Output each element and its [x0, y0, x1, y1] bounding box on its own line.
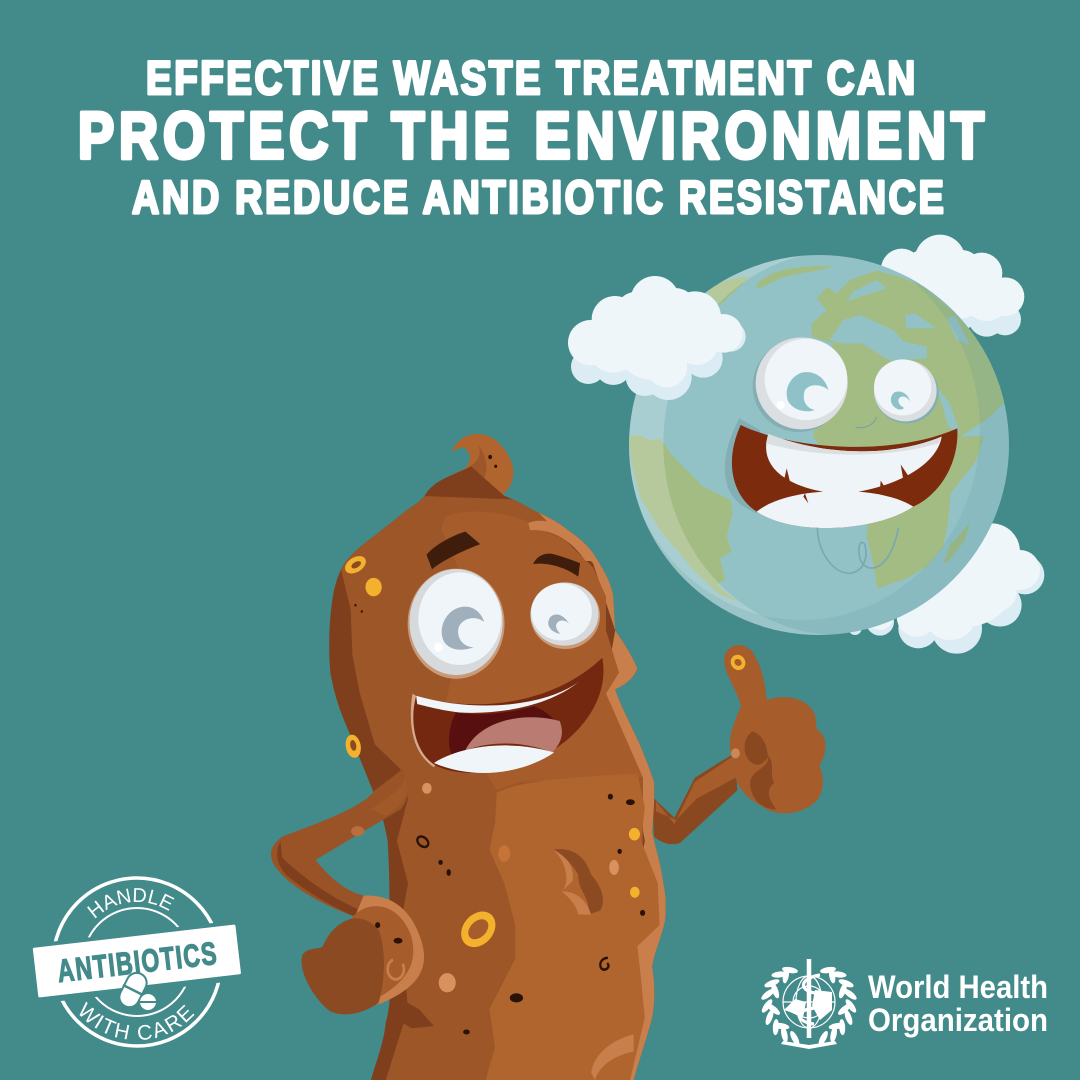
title	[78, 52, 984, 223]
cloud: top right	[881, 235, 1024, 337]
globe nose and chin	[817, 417, 898, 573]
stamp arc text: HANDLE: HANDLE	[87, 888, 174, 918]
rim light	[534, 510, 666, 1080]
globe mouth	[725, 418, 957, 528]
title: AND REDUCE ANTIBIOTIC RESISTANCE	[132, 171, 944, 223]
logo: World Health Organization wordmark	[868, 969, 1048, 1038]
corn and spots	[343, 553, 645, 1035]
poo mouth	[411, 658, 603, 773]
logo: WHO emblem	[760, 959, 858, 1049]
stamp banner: ANTIBIOTICS	[55, 935, 218, 989]
stamp rings	[53, 878, 221, 1046]
head and torso mid tone	[340, 496, 643, 1080]
title: EFFECTIVE WASTE TREATMENT CAN	[146, 52, 915, 105]
globe and staff	[783, 959, 835, 1038]
belly wrinkle	[554, 849, 603, 915]
poo right eye	[530, 582, 600, 649]
poo character	[271, 434, 826, 1080]
stamp arc text: WITH CARE: WITH CARE	[80, 1002, 194, 1040]
head rim streak	[528, 521, 595, 561]
globe	[568, 240, 1013, 637]
stamp banner	[28, 920, 246, 1004]
left arm on hip	[271, 769, 409, 921]
body	[329, 466, 666, 1080]
globe right eye	[874, 359, 939, 423]
curl on head	[425, 434, 513, 502]
stamp: handle antibiotics with care	[32, 876, 241, 1048]
globe left eye	[753, 337, 848, 432]
torso light tone	[486, 774, 660, 1080]
land: north	[757, 266, 832, 288]
earth character with clouds	[568, 235, 1044, 654]
land: Europe and Africa	[812, 271, 1007, 589]
lower dark wedge	[388, 999, 434, 1028]
title: PROTECT THE ENVIRONMENT	[78, 98, 984, 172]
eyebrows	[426, 532, 580, 577]
wreath	[760, 966, 858, 1049]
cloud: bottom right	[848, 523, 1044, 654]
rim highlights	[629, 256, 828, 635]
seas	[830, 315, 927, 361]
poo left eye	[408, 569, 505, 679]
right arm and thumbs-up hand	[652, 645, 826, 844]
cloud: left front	[568, 276, 746, 400]
face lighter tone	[441, 511, 643, 790]
icon: pills	[116, 969, 156, 1011]
logo: World Health Organization wordmark: World Health	[868, 969, 1048, 1005]
land: South America	[628, 435, 738, 602]
left fist	[302, 895, 424, 1014]
logo: World Health Organization wordmark: Organization	[868, 1002, 1048, 1038]
